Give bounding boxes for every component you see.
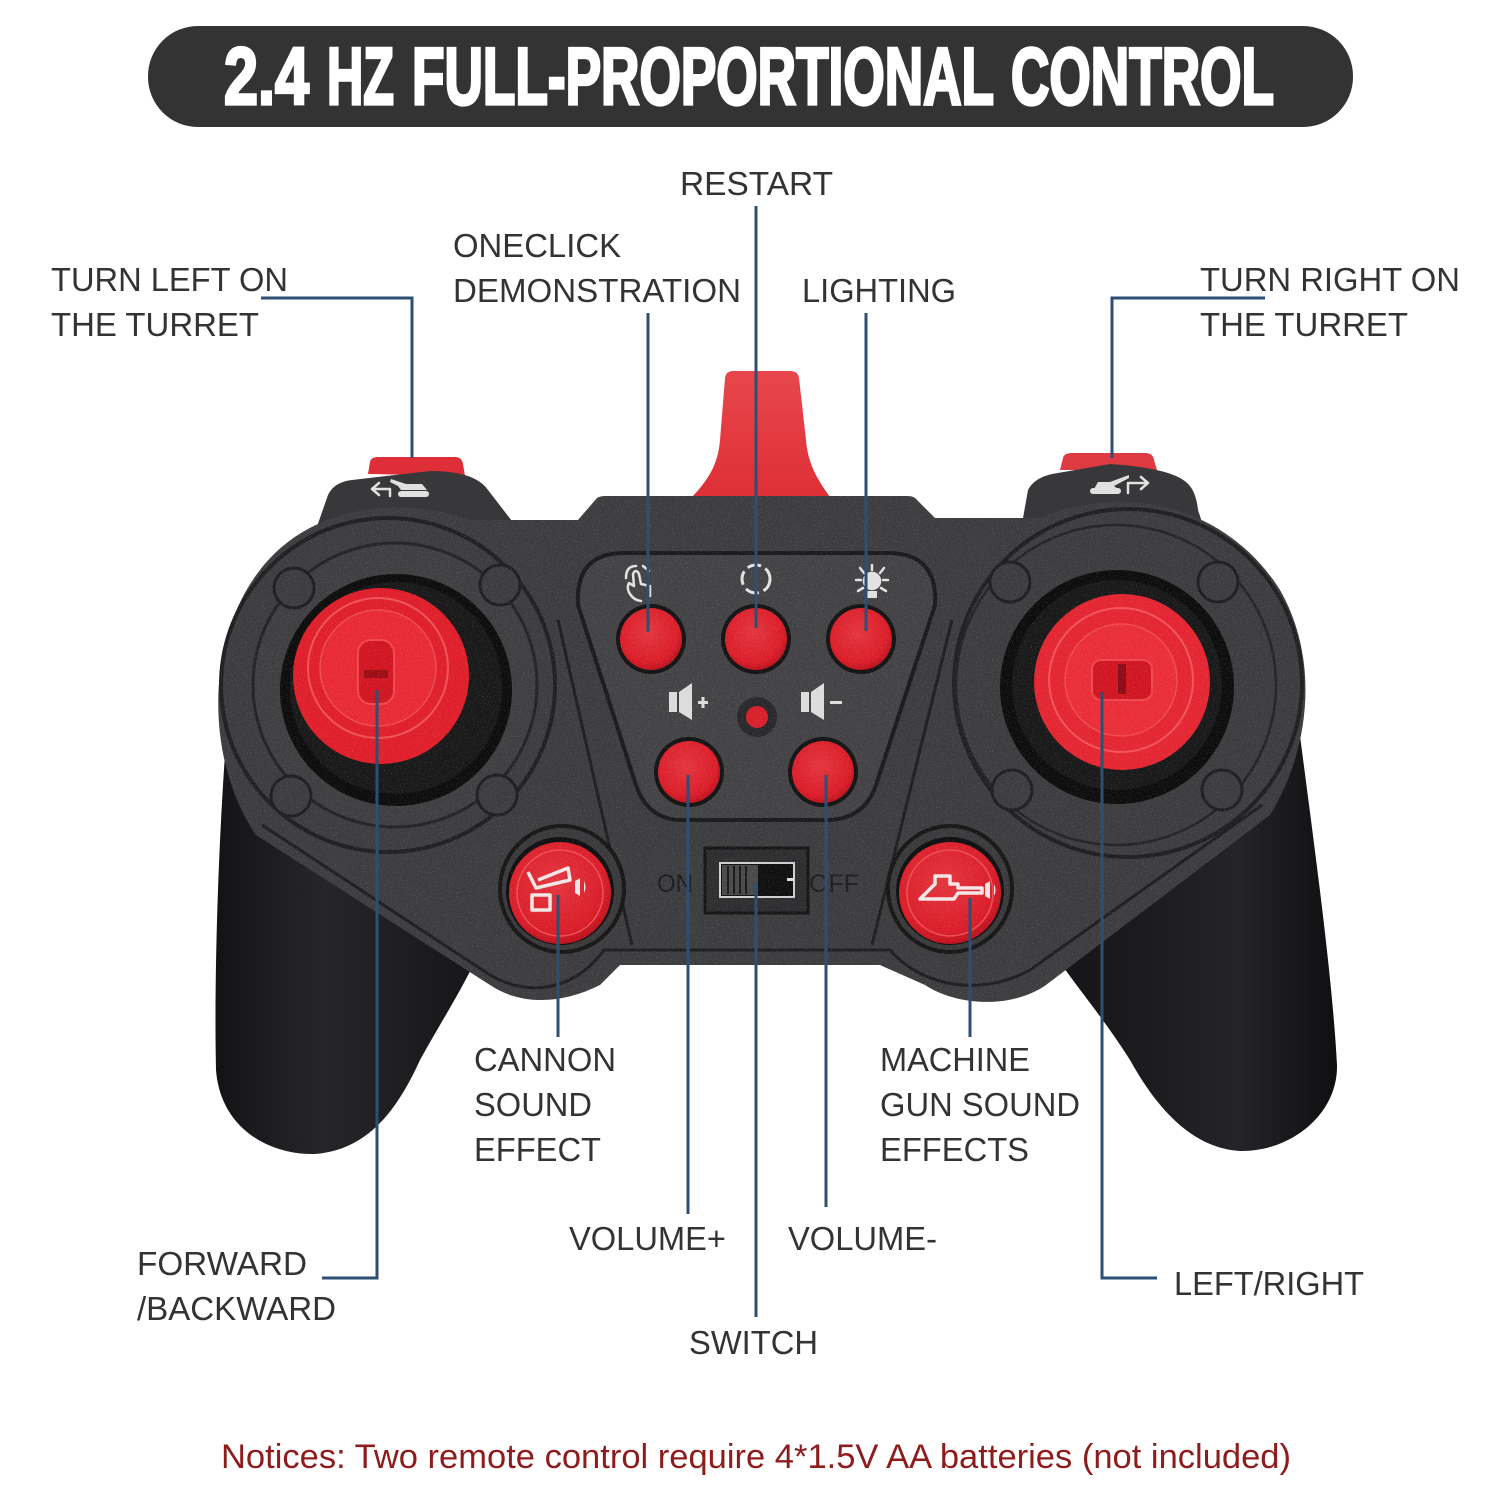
- label: turn left on the turret: [51, 261, 288, 343]
- left grip: [215, 740, 480, 1154]
- switch ON label: ON: [657, 870, 693, 898]
- icon: volume up: [669, 683, 708, 720]
- label: machine gun sound effects: [880, 1041, 1080, 1168]
- leader line: volume+: [686, 775, 690, 1214]
- icon: left turret tank: [372, 479, 429, 497]
- indicator LED: [737, 697, 777, 737]
- label: switch: SWITCH: [689, 1324, 818, 1361]
- leader line: forward/backward: [322, 690, 377, 1278]
- label: oneclick demonstration: [453, 227, 741, 309]
- label: turn left on the turret: TURN LEFT ON: [51, 261, 288, 298]
- plastic speckle texture: [200, 490, 1320, 1010]
- label: cannon sound effect: [474, 1041, 616, 1168]
- machine gun sound button: [888, 826, 1012, 952]
- label: oneclick demonstration: DEMONSTRATION: [453, 272, 741, 309]
- leader line: left/right: [1102, 692, 1157, 1278]
- cannon sound button: [500, 826, 624, 952]
- label: forward/backward: /BACKWARD: [137, 1290, 336, 1327]
- label: machine gun sound effects: EFFECTS: [880, 1131, 1029, 1168]
- title banner: 2.4: [224, 32, 309, 122]
- label: cannon sound effect: CANNON: [474, 1041, 616, 1078]
- panel button: lighting: [826, 604, 896, 674]
- right stick ring: [954, 509, 1302, 857]
- power switch: [705, 848, 808, 913]
- icon: right turret tank: [1090, 475, 1148, 494]
- label: cannon sound effect: SOUND: [474, 1086, 592, 1123]
- leader line: turn right on the turret: [1112, 298, 1265, 458]
- label: forward/backward: FORWARD: [137, 1245, 307, 1282]
- leader line: switch: [754, 882, 758, 1317]
- label: forward/backward: [137, 1245, 336, 1327]
- left bumper housing: [314, 471, 515, 560]
- label: turn right on the turret: THE TURRET: [1200, 306, 1408, 343]
- body outline groove: [262, 805, 1262, 988]
- right bumper housing: [1020, 464, 1208, 560]
- panel button: restart: [721, 604, 791, 674]
- label: turn right on the turret: [1200, 261, 1460, 343]
- label: turn left on the turret: THE TURRET: [51, 306, 259, 343]
- panel button: oneclick: [616, 604, 686, 674]
- title banner: [148, 26, 1353, 127]
- label: left/right: LEFT/RIGHT: [1174, 1265, 1364, 1302]
- label: restart: RESTART: [680, 165, 833, 202]
- leader line: cannon sound: [556, 895, 560, 1037]
- leader line: machine gun sound: [968, 898, 972, 1037]
- icon: volume down: [801, 683, 842, 720]
- leader line: restart: [754, 206, 758, 628]
- label: volume+: VOLUME+: [569, 1220, 726, 1257]
- left joystick cap: [293, 588, 469, 764]
- leader line: oneclick: [646, 313, 650, 632]
- icon: lighting bulb: [856, 565, 888, 598]
- title banner: CONTROL: [1011, 32, 1274, 122]
- title banner: FULL-PROPORTIONAL: [412, 32, 994, 122]
- leader line: turn left on the turret: [261, 298, 412, 458]
- leader line: lighting: [864, 313, 868, 631]
- icon: restart dashed circle: [742, 565, 770, 593]
- label: machine gun sound effects: GUN SOUND: [880, 1086, 1080, 1123]
- switch OFF label: OFF: [809, 870, 859, 898]
- left stick ring: [221, 518, 555, 852]
- panel side grooves: [558, 620, 952, 945]
- label: turn right on the turret: TURN RIGHT ON: [1200, 261, 1460, 298]
- right grip: [1055, 720, 1337, 1151]
- title banner: HZ: [327, 32, 394, 122]
- label: volume-: VOLUME-: [788, 1220, 937, 1257]
- remote controller: [200, 371, 1337, 1154]
- label: machine gun sound effects: MACHINE: [880, 1041, 1030, 1078]
- controller body: [218, 496, 1305, 1002]
- button panel: [578, 553, 935, 820]
- panel button: volume-: [788, 737, 858, 807]
- panel button: volume+: [654, 737, 724, 807]
- leader line: volume-: [824, 775, 828, 1207]
- notice text: Notices: Two remote control require 4*1.5V AA batteries (not included): [221, 1438, 1291, 1476]
- icon: one-click hand: [626, 566, 650, 601]
- red antenna fin: [692, 371, 830, 497]
- label: cannon sound effect: EFFECT: [474, 1131, 601, 1168]
- right shoulder button: [1060, 453, 1157, 470]
- right joystick cap: [1034, 594, 1210, 770]
- label: lighting: LIGHTING: [802, 272, 956, 309]
- left shoulder button: [368, 457, 465, 476]
- label: oneclick demonstration: ONECLICK: [453, 227, 621, 264]
